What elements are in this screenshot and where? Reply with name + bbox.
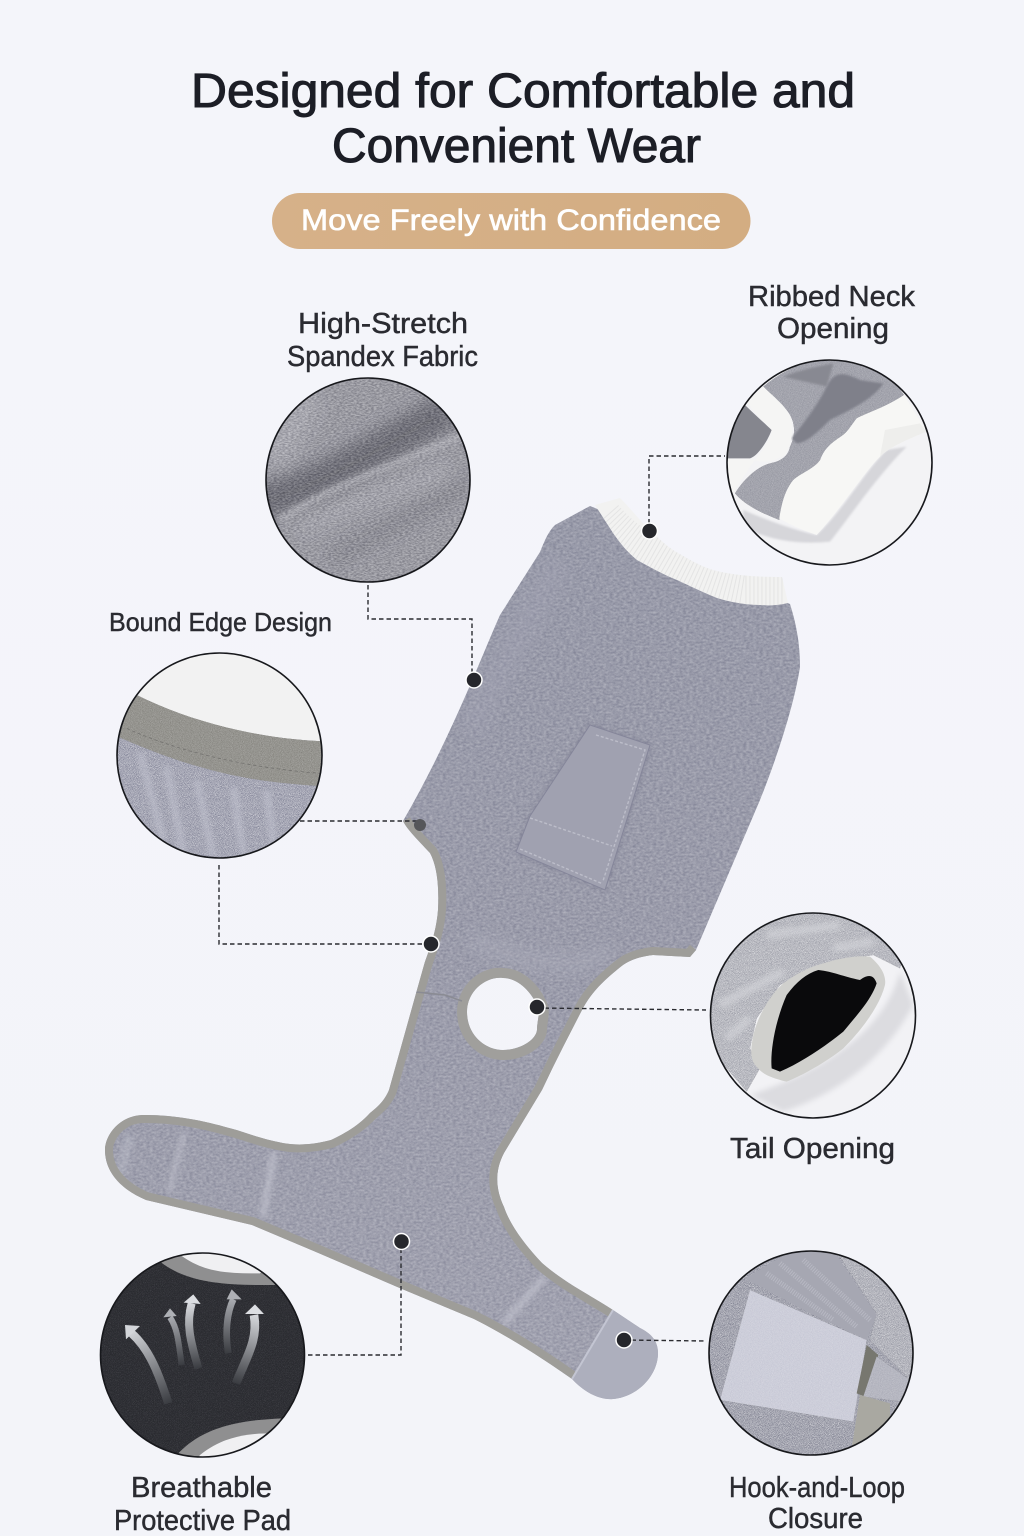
closure flap [516,725,650,890]
circle: collar close-up [728,360,926,544]
label: Ribbed Neck [748,281,915,313]
callout markers [394,523,658,1348]
label: Opening [777,313,889,345]
title [191,65,855,173]
label [114,1472,291,1536]
subtitle pill [272,193,750,249]
ribbed collar [595,498,788,605]
label: Bound Edge Design [109,607,332,637]
callout: breathable protective pad [97,1247,310,1536]
label: Hook-and-Loop [729,1472,905,1504]
label: High-Stretch [298,308,468,340]
circle: velcro close-up [707,1247,920,1460]
garment body fabric [90,490,820,1420]
callout: high-stretch spandex fabric [250,308,480,590]
label [729,1472,905,1535]
icon: airflow arrows [125,1289,264,1403]
callout: hook-and-loop closure [707,1247,920,1535]
circle: fabric close-up [266,378,470,582]
label: Tail Opening [730,1133,895,1165]
hook-and-loop tip [573,1310,658,1400]
label [287,308,478,373]
subtitle pill: Move Freely with Confidence [301,204,721,237]
title: Convenient Wear [332,120,701,173]
label: Closure [768,1503,863,1535]
garment: recovery suit [90,490,820,1420]
seam lines on legs [120,1133,545,1323]
bound edge trim [105,821,696,1379]
callout: bound edge design [107,607,333,867]
circle: dark pad close-up [101,1256,304,1456]
tail opening trim [467,978,539,1050]
label: Spandex Fabric [287,341,478,373]
title: Designed for Comfortable and [191,65,855,118]
connector lines [219,456,725,1355]
circle: trim close-up [118,695,322,858]
circle: opening close-up [711,914,914,1113]
callout: tail opening [707,905,923,1165]
callout: ribbed neck opening [720,281,940,570]
label [748,281,915,345]
label: Breathable [131,1472,272,1504]
